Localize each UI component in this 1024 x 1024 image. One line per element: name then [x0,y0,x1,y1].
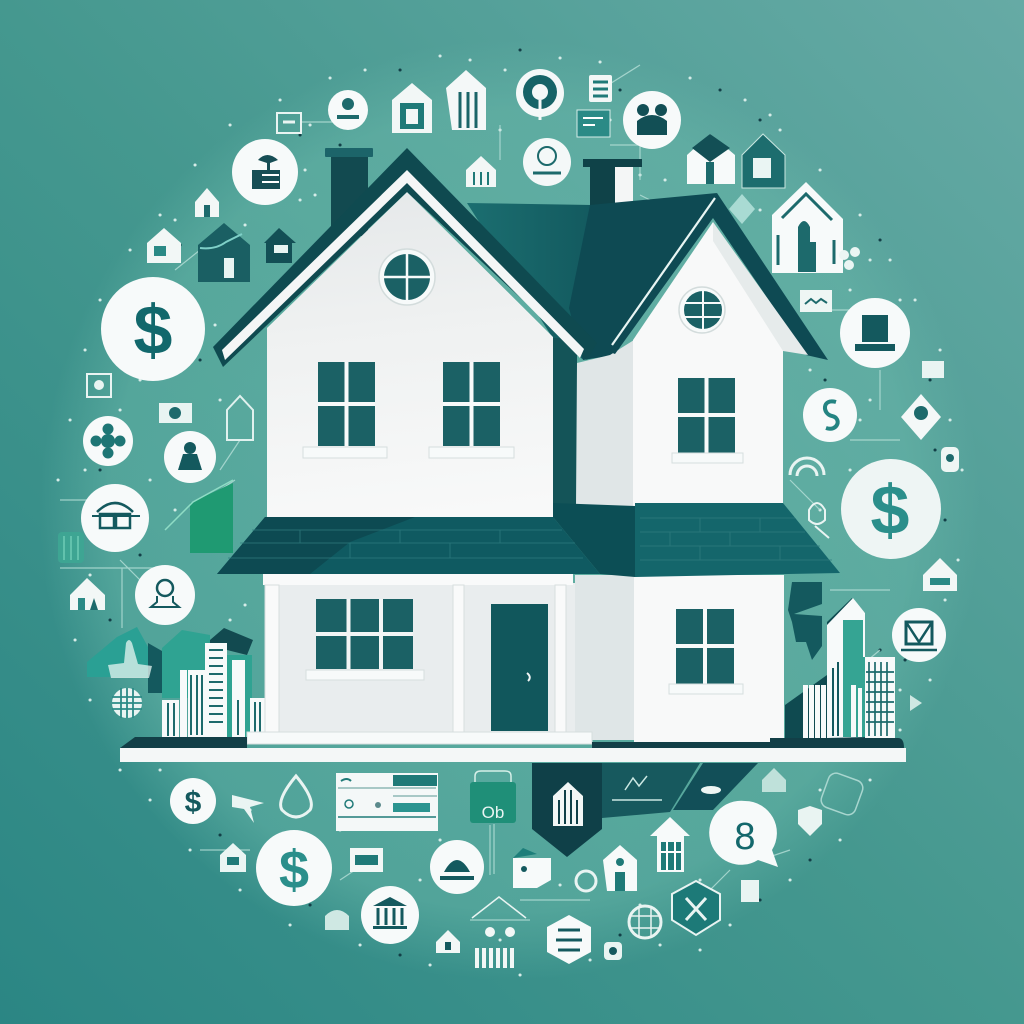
icon: small cabin far left [70,578,105,610]
icon: books circle [232,139,298,205]
icon: magnifier circle [523,138,571,186]
ground slab [120,748,906,762]
porch roof left [217,517,600,574]
icon: arch lower left [325,910,349,930]
icon: lock house [436,930,460,953]
porch column right [555,585,566,733]
lower window right [669,609,743,694]
porch beam [263,574,573,585]
round window left [379,249,435,305]
icon: s-hook circle [803,388,857,442]
icon: flower circle [83,416,133,466]
lower middle wall [575,575,635,740]
ground dark strip [120,737,904,748]
lower left wall [265,583,577,738]
icon: pin with 8 [709,801,778,867]
icon: badge right [941,447,959,472]
icon: cabin left [147,228,181,263]
icon: drop outline [281,776,311,817]
icon: city left [87,627,265,738]
icon: dark house left [198,223,250,282]
icon: small house lower left [220,843,246,872]
icon: banner card right [800,290,832,312]
icon: wifi arcs [790,458,824,476]
panel: dark strip [602,763,700,818]
right gable roof [610,193,828,360]
window upper middle [429,362,514,458]
porch roof shade [553,503,635,577]
icon: dollar coin upper left: $ [134,291,172,369]
front door [491,604,548,731]
icon: hexagon list [547,915,591,964]
middle wall [576,340,634,506]
porch floor [247,732,592,744]
icon: shield [798,806,822,836]
icon: small arrows lower right [910,695,922,711]
icon: small dark house left [264,228,296,263]
window upper right [672,378,743,463]
icon: bank circle [361,886,419,944]
lower window porch [306,599,424,680]
icon: green panel left [165,480,233,553]
icon: person circle top [328,90,368,130]
chimney right [583,159,642,210]
icon: doc [741,880,759,902]
left upper wall [267,192,553,517]
window upper left [303,362,387,458]
panel: green suitcase [470,771,516,874]
icon: dark house upper right [742,134,785,188]
icon: bag circle [164,431,216,483]
icon: dollar coil circle bottom left: $ [185,786,202,819]
icon: ring a [576,871,596,891]
back roof [467,203,592,360]
left gable roof [213,148,597,367]
panel: dark pentagon banner [532,763,602,857]
panel: green suitcase: Ob [482,803,504,822]
icon: cottage [687,134,735,184]
right upper wall [633,222,783,506]
icon: note right [922,361,944,378]
icon: folder [350,848,383,872]
house [120,148,906,762]
icon: small seal [604,942,622,960]
icon: house stripes bottom [650,817,690,872]
icon: card pair top left [277,113,301,133]
icon: lantern left [227,396,253,440]
icon: fence and roof [472,897,526,968]
icon: cash note left [159,403,192,423]
icon: laptop circle [892,608,946,662]
icon: roof mark [762,768,786,792]
icon: flourish right [839,247,860,270]
icon: tiny house top [466,156,496,187]
icon: small house with door [392,83,432,133]
icon: pin circle [135,565,195,625]
icon: dollar coil circle bottom left [170,778,216,824]
icon: people circle [623,91,681,149]
icon: diamond [729,194,755,224]
icon: glasses circle [81,484,149,552]
icon: hat circle [840,298,910,368]
icon: city right [785,582,895,738]
right dark roof [569,193,717,360]
icon: dollar coin right [841,459,941,559]
panel: appliance [336,773,438,831]
icon: pin with 8: 8 [734,816,756,858]
icon: calculator [589,75,612,102]
icon: square badge left [87,374,111,397]
icon: striped building [446,70,486,130]
icon: hexagon tools [672,881,720,935]
icon: globe left [112,688,142,718]
icon: dollar coin right: $ [871,471,909,549]
icon: headset outline [809,503,829,538]
icon: grid globe [629,906,661,938]
icon: dollar coin upper left [101,277,205,381]
middle dark gap [553,338,577,518]
porch column left [265,585,279,735]
round window right [679,287,725,333]
icon: pig shape [513,848,551,888]
icon: diamond person [901,394,941,440]
icon: small house bottom [603,845,637,891]
icon: striped card left [58,532,84,563]
icon: dollar coin bottom [256,830,332,906]
icon: target circle [516,69,564,120]
roof shingle lines [228,518,832,560]
porch column middle [453,585,464,733]
icon: dollar coin bottom: $ [279,840,309,900]
icon: teal card [577,110,610,137]
icon: house right [923,558,957,591]
icon: plane [232,795,264,823]
icon: hat circle bottom [430,840,484,894]
icon: mini house left top [195,188,219,217]
panel: dark chevron [673,763,758,810]
icon: tilted card [819,771,865,817]
porch roof right [635,503,840,577]
icon: tall house upper right [772,182,843,273]
lower right wall [634,575,784,742]
chimney left [325,148,373,236]
